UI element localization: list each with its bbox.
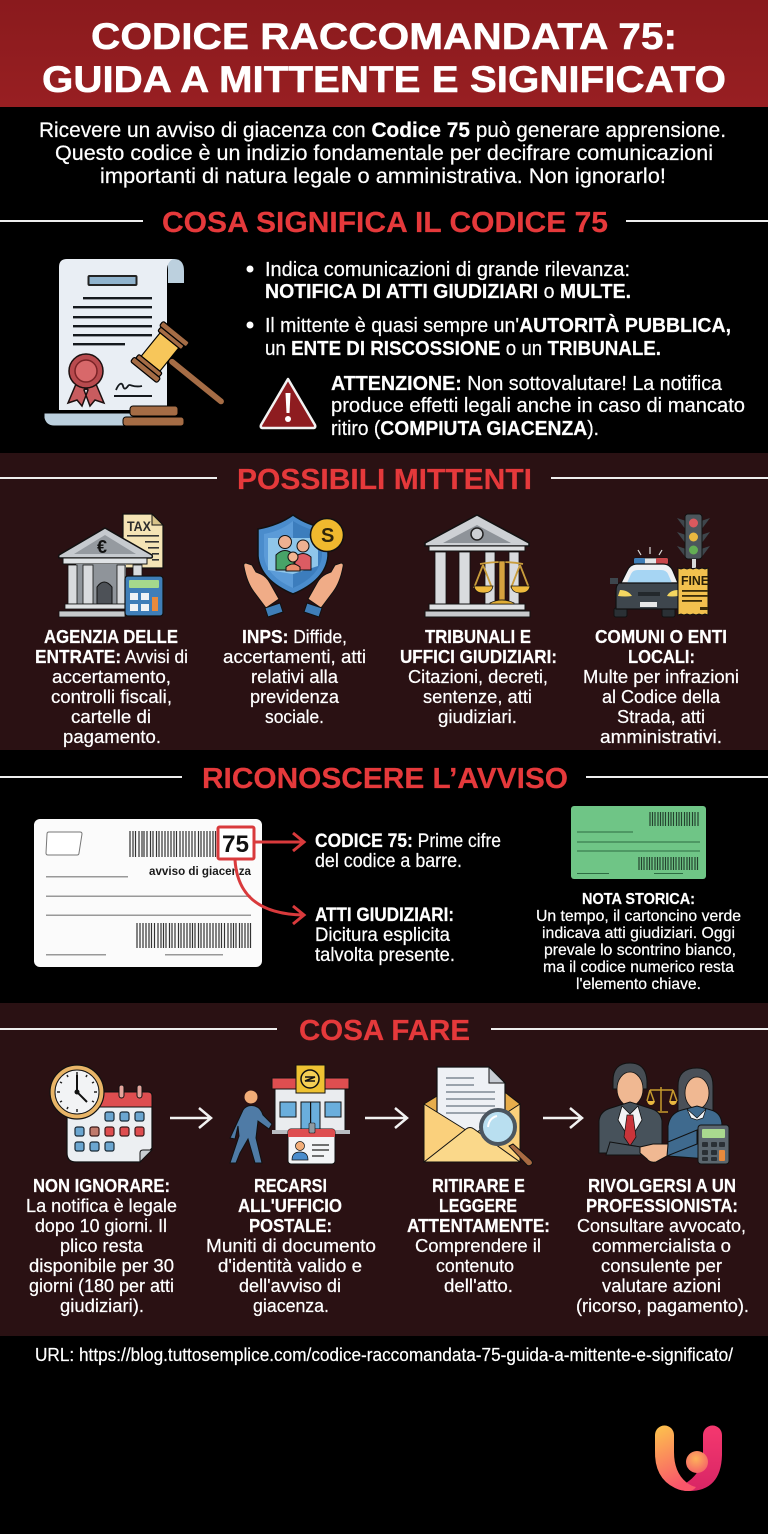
nota storica: ma il codice numerico resta bbox=[543, 959, 734, 976]
bullet list: NOTIFICA DI ATTI GIUDIZIARI o MULTE. bbox=[265, 281, 631, 303]
card: agenzia delle entrate: controlli fiscali, bbox=[51, 687, 172, 707]
step: non ignorare: giudiziari). bbox=[60, 1296, 144, 1316]
label: codice 75: CODICE 75: Prime cifre bbox=[315, 831, 501, 852]
source url: URL: https://blog.tuttosemplice.com/codice-raccomandata-75-guida-a-mittente-e-significato/ bbox=[35, 1345, 733, 1365]
panel: possibili mittenti bbox=[0, 453, 768, 750]
step: recarsi: giacenza. bbox=[253, 1296, 329, 1316]
label: atti giudiziari: ATTI GIUDIZIARI: bbox=[315, 905, 454, 926]
nota storica bbox=[536, 891, 741, 993]
bullet list bbox=[246, 259, 731, 360]
icon: logo bbox=[655, 1426, 722, 1491]
step: recarsi: ALL'UFFICIO bbox=[238, 1196, 342, 1216]
callout: attenzione bbox=[331, 373, 745, 440]
card: comuni: COMUNI O ENTI bbox=[595, 627, 727, 647]
white notice card: avviso di giacenza bbox=[149, 864, 251, 878]
panel: header banner bbox=[0, 0, 768, 107]
step: recarsi: dell'avviso di bbox=[239, 1276, 341, 1296]
card: comuni: Strada, atti bbox=[617, 707, 705, 727]
code 75 box: 75 bbox=[222, 831, 249, 858]
step: ritirare: RITIRARE E bbox=[432, 1176, 525, 1196]
white notice card bbox=[34, 819, 304, 967]
title bbox=[42, 16, 726, 100]
card: agenzia delle entrate: cartelle di bbox=[71, 707, 151, 727]
callout: attenzione: produce effetti legali anche in caso di mancato bbox=[331, 395, 745, 417]
step: ritirare bbox=[407, 1176, 550, 1296]
card: tribunali: Citazioni, decreti, bbox=[408, 667, 548, 687]
panel: cosa fare bbox=[0, 1003, 768, 1336]
label: codice 75: del codice a barre. bbox=[315, 851, 462, 872]
card: inps bbox=[223, 627, 366, 727]
step: ritirare: contenuto bbox=[436, 1256, 514, 1276]
card: comuni: Multe per infrazioni bbox=[583, 667, 739, 687]
step: non ignorare bbox=[26, 1176, 177, 1316]
label: atti giudiziari bbox=[315, 905, 455, 966]
barcode bottom bbox=[137, 923, 250, 948]
card: comuni: al Codice della bbox=[602, 687, 721, 707]
step: recarsi: RECARSI bbox=[254, 1176, 327, 1196]
label: atti giudiziari: Dicitura esplicita bbox=[315, 925, 450, 946]
card: agenzia delle entrate: accertamento, bbox=[52, 667, 171, 687]
heading: riconoscere l'avviso: RICONOSCERE L’AVVISO bbox=[202, 763, 568, 795]
step: rivolgersi bbox=[576, 1176, 749, 1316]
intro text bbox=[39, 119, 726, 188]
arrow: step 2 to 3 bbox=[365, 1108, 407, 1128]
nota storica: indicava atti giudiziari. Oggi bbox=[542, 925, 735, 942]
heading: possibili mittenti: POSSIBILI MITTENTI bbox=[237, 464, 532, 496]
step: ritirare: dell'atto. bbox=[444, 1276, 513, 1296]
icon: tax office: TAX bbox=[127, 518, 152, 534]
nota storica: Un tempo, il cartoncino verde bbox=[536, 908, 741, 925]
step: recarsi: POSTALE: bbox=[249, 1216, 332, 1236]
heading: cosa significa: COSA SIGNIFICA IL CODICE 75 bbox=[162, 207, 608, 239]
card: inps: relativi alla bbox=[251, 667, 339, 687]
card: tribunali: giudiziari. bbox=[438, 707, 517, 727]
card: agenzia delle entrate: AGENZIA DELLE bbox=[44, 627, 178, 647]
card: tribunali bbox=[400, 627, 557, 727]
icon: warning triangle bbox=[261, 379, 315, 428]
callout: attenzione: ATTENZIONE: Non sottovalutare! La notifica bbox=[331, 373, 723, 395]
icon: walking to post office bbox=[230, 1065, 350, 1164]
icon: social security shield: S bbox=[321, 525, 334, 547]
step: non ignorare: dopo 10 giorni. Il bbox=[35, 1216, 167, 1236]
card: comuni: LOCALI: bbox=[628, 647, 695, 667]
card: agenzia delle entrate: pagamento. bbox=[63, 727, 161, 747]
nota storica: l'elemento chiave. bbox=[576, 976, 701, 993]
step: recarsi: Muniti di documento bbox=[206, 1236, 376, 1256]
step: recarsi: d'identità valido e bbox=[218, 1256, 362, 1276]
arrow: step 3 to 4 bbox=[543, 1108, 582, 1128]
step: ritirare: Comprendere il bbox=[415, 1236, 541, 1256]
bullet list: Indica comunicazioni di grande rilevanza: bbox=[265, 259, 630, 281]
step: non ignorare: NON IGNORARE: bbox=[33, 1176, 170, 1196]
code 75 box bbox=[218, 827, 254, 859]
step: non ignorare: plico resta bbox=[60, 1236, 144, 1256]
card: tribunali: UFFICI GIUDIZIARI: bbox=[400, 647, 557, 667]
title: GUIDA A MITTENTE E SIGNIFICATO bbox=[42, 59, 726, 100]
icon: tax office bbox=[59, 514, 163, 617]
label: codice 75 bbox=[315, 831, 501, 872]
step: rivolgersi: (ricorso, pagamento). bbox=[576, 1296, 749, 1316]
bullet list: Il mittente è quasi sempre un'AUTORITÀ PUBBLICA, bbox=[265, 314, 731, 337]
step: ritirare: ATTENTAMENTE: bbox=[407, 1216, 550, 1236]
step: rivolgersi: commercialista o bbox=[592, 1236, 731, 1256]
icon: envelope and magnifier bbox=[424, 1067, 532, 1166]
nota storica: prevale lo scontrino bianco, bbox=[544, 942, 736, 959]
icon: social security shield bbox=[244, 515, 344, 617]
card: agenzia delle entrate bbox=[35, 627, 188, 747]
step: rivolgersi: valutare azioni bbox=[602, 1276, 721, 1296]
card: inps: previdenza bbox=[250, 687, 340, 707]
step: non ignorare: La notifica è legale bbox=[26, 1196, 177, 1216]
icon: tax office: € bbox=[97, 537, 107, 557]
bullet list: un ENTE DI RISCOSSIONE o un TRIBUNALE. bbox=[265, 338, 661, 360]
callout: attenzione: ritiro (COMPIUTA GIACENZA). bbox=[331, 418, 599, 440]
card: comuni: amministrativi. bbox=[600, 727, 722, 747]
step: recarsi bbox=[206, 1176, 376, 1316]
step: non ignorare: disponibile per 30 bbox=[29, 1256, 174, 1276]
intro text: importanti di natura legale o amministrativa. Non ignorarlo! bbox=[100, 165, 666, 188]
card: tribunali: TRIBUNALI E bbox=[425, 627, 531, 647]
icon: professionals handshake bbox=[599, 1063, 729, 1164]
intro text: Questo codice è un indizio fondamentale per decifrare comunicazioni bbox=[55, 142, 713, 165]
step: rivolgersi: RIVOLGERSI A UN bbox=[588, 1176, 736, 1196]
step: rivolgersi: PROFESSIONISTA: bbox=[586, 1196, 738, 1216]
arrow: step 1 to 2 bbox=[170, 1108, 211, 1128]
intro text: Ricevere un avviso di giacenza con Codice 75 può generare apprensione. bbox=[39, 119, 726, 142]
step: ritirare: LEGGERE bbox=[439, 1196, 517, 1216]
green card bbox=[571, 806, 706, 879]
step: rivolgersi: Consultare avvocato, bbox=[577, 1216, 746, 1236]
nota storica: NOTA STORICA: bbox=[582, 891, 695, 908]
step: rivolgersi: consulente per bbox=[601, 1256, 722, 1276]
card: inps: INPS: Diffide, bbox=[242, 627, 347, 647]
card: tribunali: sentenze, atti bbox=[423, 687, 532, 707]
step: non ignorare: giorni (180 per atti bbox=[29, 1276, 174, 1296]
label: atti giudiziari: talvolta presente. bbox=[315, 945, 455, 966]
card: agenzia delle entrate: ENTRATE: Avvisi di bbox=[35, 647, 188, 667]
card: inps: sociale. bbox=[265, 707, 324, 727]
barcode top bbox=[130, 831, 216, 857]
icon: police car, traffic light and fine: FINE bbox=[681, 573, 709, 588]
icon: police car, traffic light and fine bbox=[610, 514, 710, 617]
icon: legal document and gavel bbox=[44, 259, 240, 426]
card: inps: accertamenti, atti bbox=[223, 647, 366, 667]
icon: courthouse with scales bbox=[425, 515, 530, 617]
title: CODICE RACCOMANDATA 75: bbox=[91, 16, 677, 57]
arrow: to codice 75 bbox=[255, 833, 304, 851]
heading: cosa fare: COSA FARE bbox=[299, 1015, 470, 1047]
card: comuni bbox=[583, 627, 739, 747]
arrow: curved to atti giudiziari bbox=[235, 860, 304, 924]
icon: clock and calendar bbox=[50, 1065, 152, 1162]
